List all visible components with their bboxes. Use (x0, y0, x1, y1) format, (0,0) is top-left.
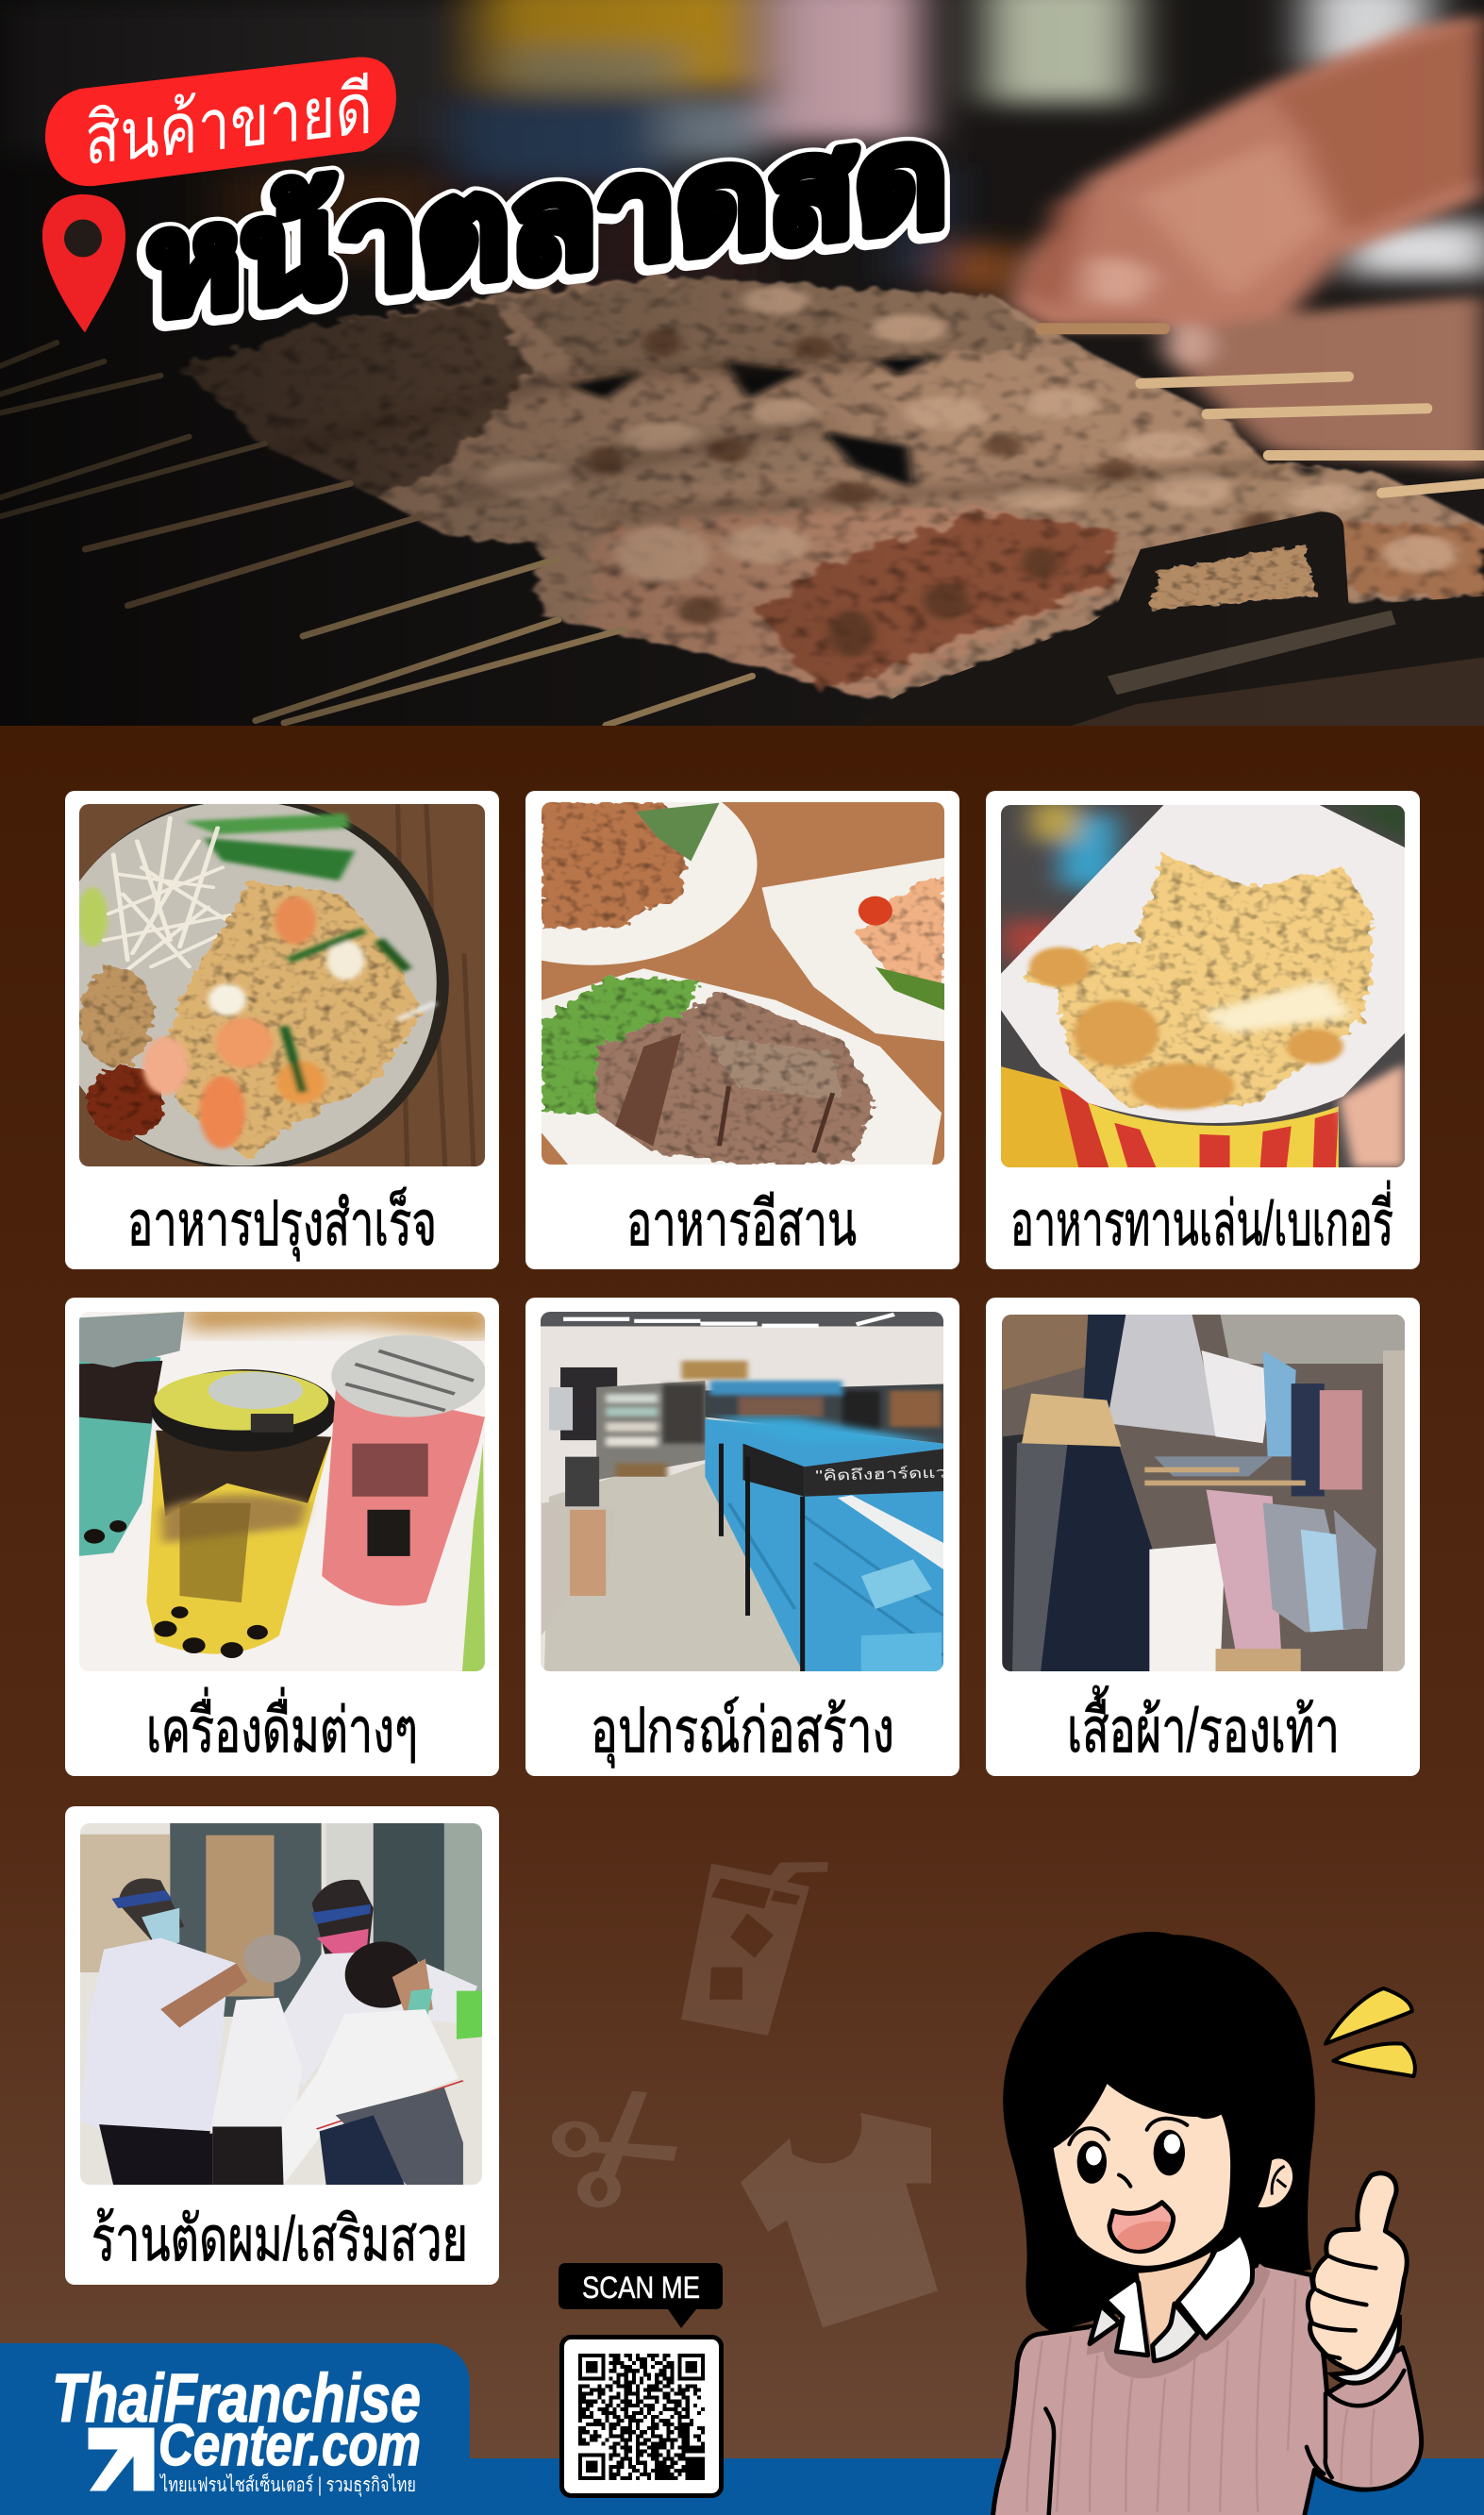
panel: อาหารอีสาน (525, 791, 959, 1269)
callout: SCAN ME: SCAN ME (582, 2271, 700, 2305)
sweater ribs (1026, 2279, 1375, 2512)
photo: snack chips cup (1001, 805, 1405, 1167)
character: girl giving thumbs up (991, 1932, 1425, 2515)
icon: red location pin (42, 194, 125, 332)
blue footer bar (470, 2458, 1484, 2515)
panel: อุปกรณ์ก่อสร้าง (525, 1298, 959, 1776)
icon: t-shirt watermark (741, 2113, 938, 2327)
panel: อาหารปรุงสำเร็จ (65, 791, 499, 1269)
shirt collar (1090, 2233, 1253, 2361)
neck (1139, 2252, 1210, 2356)
finger lines and arm lines (1045, 2255, 1404, 2515)
sweater (992, 2264, 1422, 2515)
logo arrow (87, 2426, 156, 2492)
hair (1003, 1932, 1315, 2332)
photo: bubble tea (79, 1312, 485, 1671)
panel: อาหารทานเล่น/เบเกอรี่ (986, 791, 1420, 1269)
callout: SCAN ME (559, 2263, 723, 2328)
ear (1258, 2158, 1292, 2207)
brows and nose (1069, 2119, 1187, 2187)
cuff (1332, 2315, 1400, 2383)
logo wordmark (52, 2361, 421, 2478)
photo: isan food (542, 802, 944, 1165)
label: อาหารอีสาน (626, 1188, 857, 1258)
icon: scissors watermark (552, 2091, 677, 2208)
eyes (1077, 2130, 1185, 2184)
header photo: grilled pork skewers (0, 0, 1484, 726)
sparks (1326, 1988, 1415, 2076)
photo: barbers (80, 1823, 482, 2185)
title: หน้าตลาดสด: หน้าตลาดสด (145, 101, 945, 348)
icon: drink cup watermark (681, 1862, 828, 2036)
photo: clothes rack (1002, 1315, 1405, 1671)
face (1051, 2080, 1233, 2268)
collar shadow (1087, 2264, 1271, 2378)
hand: thumbs up (1308, 2173, 1407, 2372)
logo wordmark: Center.com (158, 2413, 421, 2478)
QR code (559, 2335, 724, 2498)
photo: pad thai (79, 804, 485, 1166)
mouth (1109, 2203, 1174, 2252)
panel: เสื้อผ้า/รองเท้า (986, 1298, 1420, 1776)
logo panel (0, 2343, 470, 2515)
panel: เครื่องดื่มต่างๆ (65, 1298, 499, 1776)
photo: hardware store (541, 1312, 943, 1671)
title: หน้าตลาดสด: หน้าตลาดสด (147, 97, 947, 345)
panel: ร้านตัดผม/เสริมสวย (65, 1806, 499, 2285)
